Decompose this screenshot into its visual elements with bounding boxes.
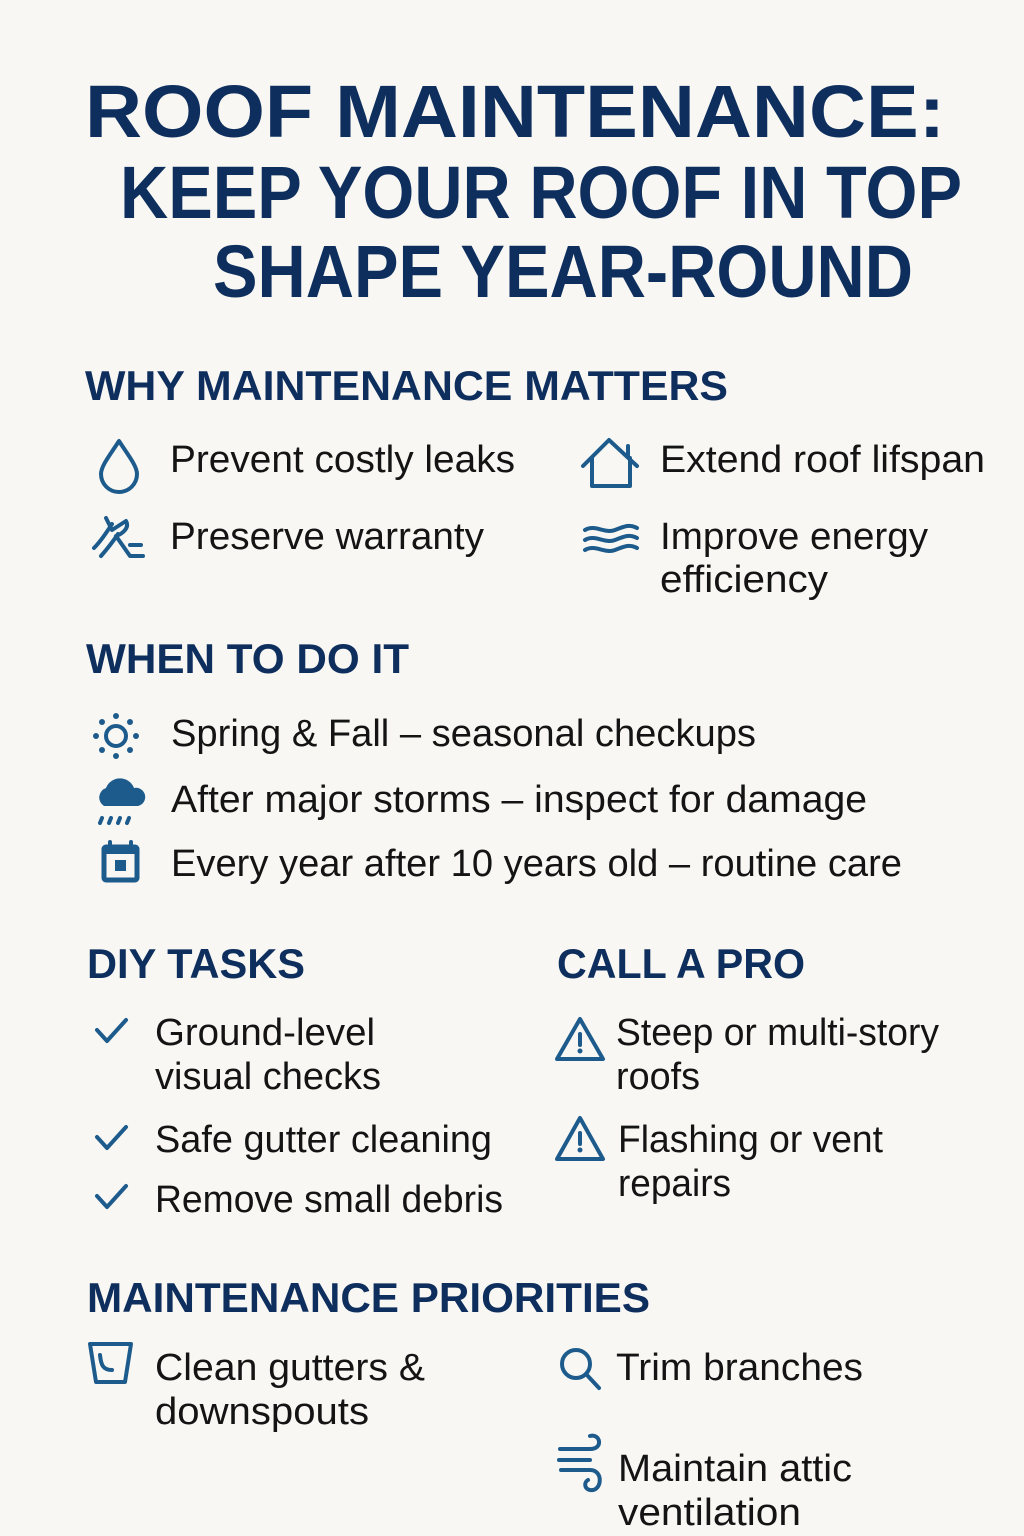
icon: house — [583, 440, 637, 486]
icon: checkmarks — [97, 1020, 126, 1207]
icon: water drop — [101, 441, 137, 492]
text: pro list: Steep or multi-story — [616, 1012, 939, 1054]
text: extend roof lifespan: Extend roof lifspan — [660, 439, 985, 481]
text: after major storms: After major storms – inspect for damage — [171, 779, 867, 821]
text: pro list — [616, 1012, 939, 1205]
icon: magnifier — [562, 1350, 599, 1388]
text: pro list: repairs — [618, 1163, 731, 1205]
text: spring & fall: Spring & Fall – seasonal checkups — [171, 713, 756, 755]
text: preserve warranty: Preserve warranty — [170, 516, 484, 558]
text: every year: Every year after 10 years old – routine care — [171, 843, 902, 885]
text: pro list: Flashing or vent — [618, 1119, 883, 1161]
title — [85, 70, 962, 313]
heading: call a pro: CALL A PRO — [557, 940, 805, 987]
icon: warranty figure — [94, 518, 143, 556]
panel: call a pro — [557, 1012, 939, 1205]
panel: priorities — [90, 1344, 863, 1534]
heading: maintenance priorities: MAINTENANCE PRIORITIES — [87, 1274, 650, 1321]
panel: why maintenance matters items: efficiency — [660, 559, 828, 601]
icon: wind — [559, 1436, 600, 1490]
text: diy list: Safe gutter cleaning — [155, 1119, 492, 1161]
text: diy list: Remove small debris — [155, 1179, 503, 1221]
text: pro list: roofs — [616, 1056, 700, 1098]
text: diy list — [155, 1012, 503, 1221]
heading: when to do it: WHEN TO DO IT — [86, 635, 409, 682]
icon: gutter bucket — [90, 1344, 131, 1382]
panel: priorities: downspouts — [155, 1391, 369, 1433]
icon: waves — [585, 526, 637, 551]
text: clean gutters: Clean gutters & — [155, 1347, 425, 1389]
panel: when to do it items — [93, 713, 902, 885]
panel: priorities: ventilation — [618, 1492, 801, 1534]
icon: rain cloud — [99, 778, 145, 823]
text: diy list: visual checks — [155, 1056, 381, 1098]
panel: diy tasks — [97, 1012, 503, 1221]
heading: diy tasks: DIY TASKS — [87, 940, 305, 987]
icon: calendar — [104, 842, 137, 880]
panel: why maintenance matters items — [94, 439, 985, 601]
icon: warning triangles — [557, 1019, 603, 1159]
text: maintain attic ventilation: Maintain attic — [618, 1448, 852, 1490]
text: improve energy efficiency: Improve energy — [660, 516, 928, 558]
title: ROOF MAINTENANCE: — [85, 70, 945, 153]
text: trim branches: Trim branches — [616, 1347, 863, 1389]
icon: sun — [93, 713, 139, 759]
text: diy list: Ground-level — [155, 1012, 375, 1054]
heading: why maintenance matters: WHY MAINTENANCE MATTERS — [85, 362, 728, 409]
text: prevent costly leaks: Prevent costly leaks — [170, 439, 515, 481]
title: SHAPE YEAR-ROUND — [213, 230, 913, 313]
